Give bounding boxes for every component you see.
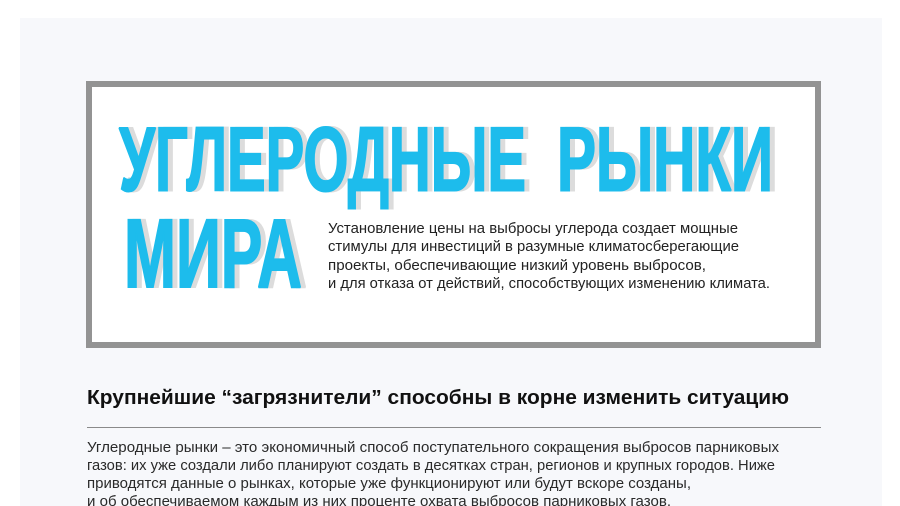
body paragraph: Углеродные рынки – это экономичный способ поступательного сокращения выбросов парниковых xyxy=(87,440,780,456)
title shadow: РЫНКИ xyxy=(562,110,778,210)
title shadow xyxy=(124,110,778,308)
intro text: проекты, обеспечивающие низкий уровень выбросов, xyxy=(328,258,706,274)
title shadow: МИРА xyxy=(129,199,307,308)
title: РЫНКИ xyxy=(557,110,773,210)
title xyxy=(119,110,773,308)
intro text xyxy=(328,221,770,292)
body paragraph: приводятся данные о рынках, которые уже функционируют или будут вскоре созданы, xyxy=(87,476,691,492)
intro text: и для отказа от действий, способствующих изменению климата. xyxy=(328,276,770,292)
body paragraph xyxy=(87,440,780,506)
title frame panel xyxy=(89,84,818,345)
section heading: Крупнейшие “загрязнители” способны в корне изменить ситуацию xyxy=(87,387,789,409)
title: УГЛЕРОДНЫЕ xyxy=(119,110,526,210)
title shadow: УГЛЕРОДНЫЕ xyxy=(124,110,531,210)
intro text: Установление цены на выбросы углерода создает мощные xyxy=(328,221,738,237)
body paragraph: газов: их уже создали либо планируют создать в десятках стран, регионов и крупных городов. Ниже xyxy=(87,458,775,474)
title: МИРА xyxy=(124,199,302,308)
intro text: стимулы для инвестиций в разумные климатосберегающие xyxy=(328,239,739,255)
